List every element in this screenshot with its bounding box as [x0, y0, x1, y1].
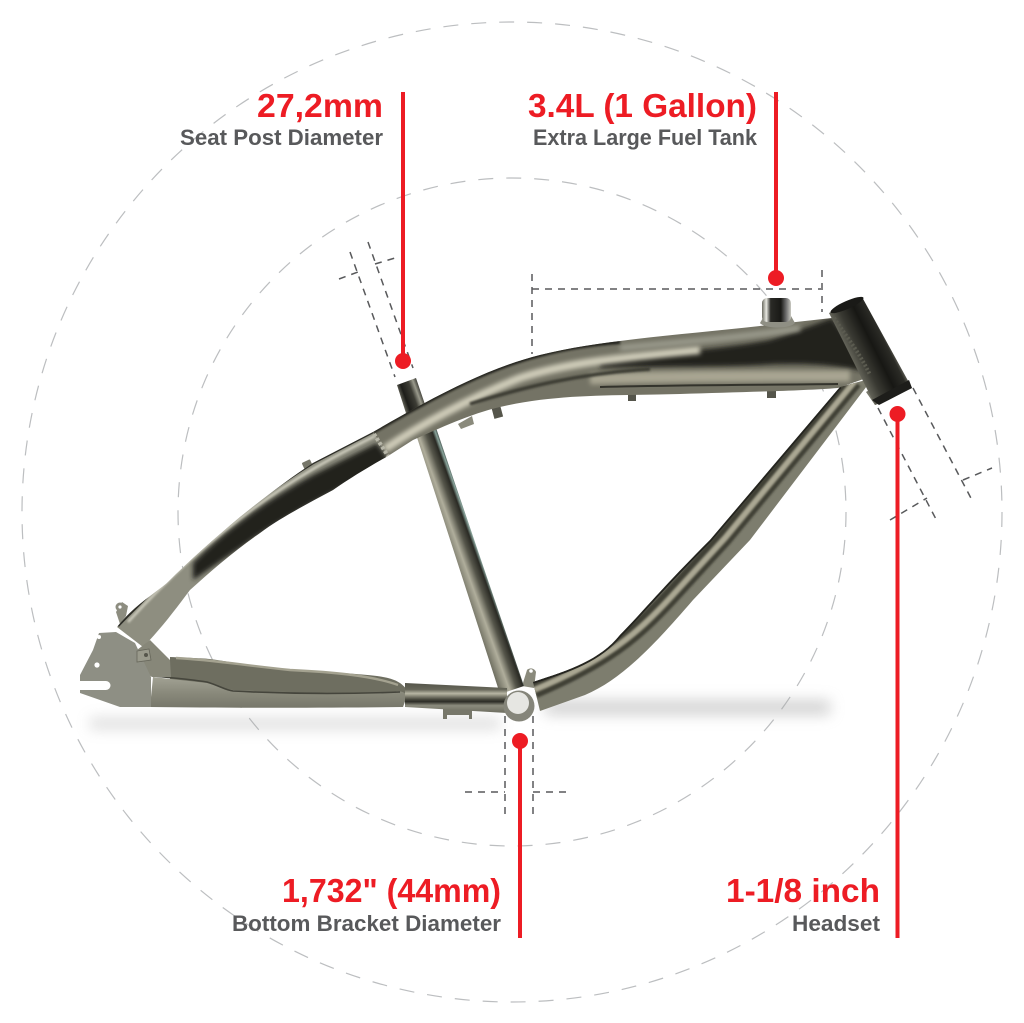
rear dropout plate — [80, 632, 151, 707]
bicycle frame — [80, 294, 912, 722]
seat tube — [412, 416, 524, 694]
tank filler cap — [760, 298, 795, 328]
callout: headset — [726, 406, 906, 938]
small mounting tabs — [116, 388, 776, 719]
head tube weld — [834, 318, 870, 375]
fuel tank dimension lines — [532, 270, 822, 354]
dropout holes — [94, 635, 101, 668]
bottom bracket dimension lines — [465, 716, 572, 820]
bottom bracket shell — [504, 690, 534, 722]
seat post dimension lines — [339, 242, 413, 377]
bottom bracket stay — [405, 683, 507, 713]
connector gusset — [135, 640, 171, 677]
callout: bottom bracket: Bottom Bracket Diameter — [232, 911, 501, 936]
ground shadow — [90, 700, 830, 729]
weld at seat cluster — [374, 434, 388, 456]
seat post stub — [397, 378, 432, 432]
down tube — [533, 380, 866, 711]
chainstay highlights — [176, 658, 398, 685]
rear upper stay — [117, 432, 388, 646]
top tube — [373, 318, 862, 456]
callout: seat post: 27,2mm — [257, 87, 383, 124]
callout: headset: Headset — [792, 911, 881, 936]
callout: bottom bracket — [232, 733, 528, 938]
callout: fuel tank: Extra Large Fuel Tank — [533, 125, 758, 150]
callout: fuel tank: 3.4L (1 Gallon) — [528, 87, 757, 124]
chainstay edge line — [153, 676, 400, 693]
chainstay lower plate — [150, 677, 407, 708]
callout: seat post — [180, 87, 411, 369]
headset dimension lines — [878, 388, 992, 523]
callout: seat post: Seat Post Diameter — [180, 125, 383, 150]
chainstay upper — [170, 657, 407, 698]
dropout bracket — [137, 649, 151, 662]
head tube — [829, 294, 912, 405]
callout: bottom bracket: 1,732" (44mm) — [282, 872, 501, 909]
callout: fuel tank — [528, 87, 784, 286]
callout: headset: 1-1/8 inch — [726, 872, 880, 909]
